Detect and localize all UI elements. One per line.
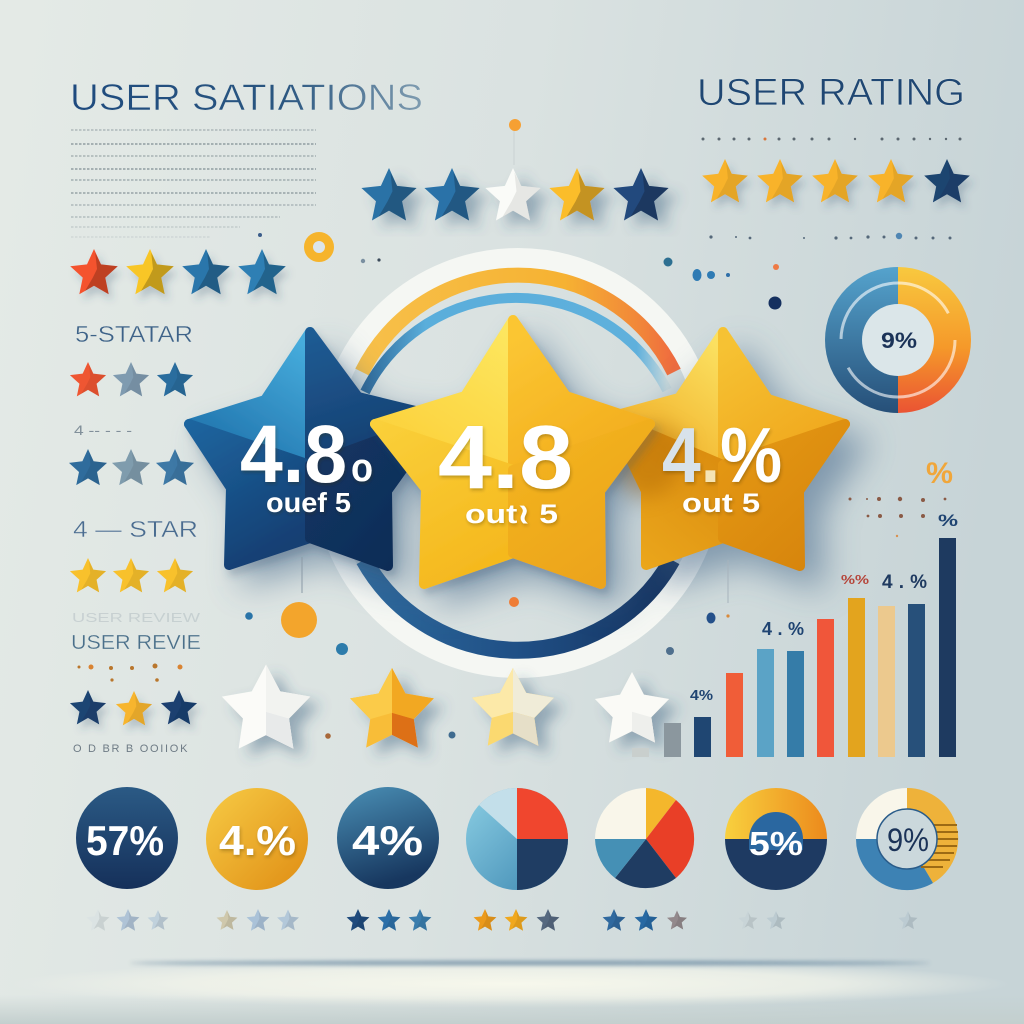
rating 4% on orange star: out 5 [682,488,760,518]
floor band [0,960,1024,1024]
stem above center star [513,130,515,165]
bar chart labels [690,457,958,704]
title: user satiations: USER SATIATIONS [70,77,423,118]
donut chart: 9%: 9% [887,822,929,858]
middle row of stars [222,664,669,749]
dots above rating stars [702,138,962,140]
big star: blue [189,332,440,566]
rating 4% on orange star: 4.% [662,411,782,499]
user rating star row [702,159,970,202]
left star row: mixed colors [70,249,286,294]
bar chart labels: 4% [690,687,713,704]
pie chart: 5% half circles: 5% [749,825,803,862]
navy arc [364,560,672,650]
stat circle: 4%: 4% [352,817,423,864]
donut center [862,304,934,376]
title: user rating: USER RATING [697,72,965,114]
orange review dots [78,664,182,682]
rating 4.8 on gold star: out≀ 5 [465,499,558,529]
rating 4.8 on gold star: 4.8 [438,408,573,508]
rating 4.8 on blue star: 4.8 [240,409,347,500]
pie chart: five slices [595,788,694,888]
facet: lower right [723,424,845,566]
white ring top [327,258,709,449]
star row: blurred 4 [69,449,194,485]
star: gold [350,668,434,748]
big star: gold center [375,320,650,584]
stat circle: 4% [337,787,439,889]
facet: top left [189,332,310,465]
facet: top left [375,320,513,470]
pie chart: 5% half circles [725,788,827,890]
bar chart labels: 4.% [882,572,927,593]
bar chart [632,538,956,757]
stat circle: 4.%: 4.% [219,817,296,864]
label: blurred 4 row: 4 -- - - - [74,422,132,438]
facet: top left [610,332,723,465]
facet: lower right [310,417,440,566]
bar chart labels: 4.% [762,619,804,639]
donut chart top right [825,267,971,413]
stat circle: 57% [76,787,178,889]
decorative dots near top right [258,119,782,310]
bottom star rows [87,909,918,931]
facet: lower left [189,424,310,565]
text block: blurred description lines [71,130,316,237]
facet: top right [513,320,650,470]
facet: lower left [375,424,513,584]
rainbow ring group [323,258,713,668]
star: cream [472,668,554,746]
rating 4.8 on blue star: o [351,446,373,490]
star: white [222,664,310,749]
label: 5-star: 5-STATAR [75,321,193,347]
dots below rating stars [709,233,952,240]
facet: lower left [610,417,723,565]
bar chart labels: %% [841,572,870,587]
star row: 5-star [70,362,193,396]
orange ball [281,602,317,638]
white ring bottom [323,473,713,668]
faded label: USER REVIEW [72,610,201,625]
bar chart top dots [848,497,946,537]
facet: lower right [513,424,650,584]
small caption: O D BR B OOIIOK [73,743,189,755]
star: small white [595,672,669,743]
bar chart labels: % [926,457,953,490]
shade cast on orange star by gold star [610,420,690,500]
big star soft shadow [200,332,871,608]
label: 4-star: 4 — STAR [73,516,198,542]
donut chart: 9% [856,788,958,890]
star row: user review [70,690,197,725]
top center star row [361,168,669,220]
orange arc [362,275,674,372]
star row: gold [70,558,193,592]
pie chart: red quadrant [466,788,568,890]
stat circle: 4.% [206,788,308,890]
orange ring accent [308,236,330,258]
stat circle: 57%: 57% [86,817,164,864]
donut value: 9% [881,328,917,353]
scattered dots around middle [245,557,730,739]
blue arc [365,298,667,392]
rating 4.8 on blue star: ouef 5 [266,487,351,518]
facet: top right [310,332,440,465]
label: user review: USER REVIE [71,632,201,654]
big star: orange right [610,332,845,566]
bar chart labels: % [938,511,958,530]
facet: top right [723,332,845,465]
